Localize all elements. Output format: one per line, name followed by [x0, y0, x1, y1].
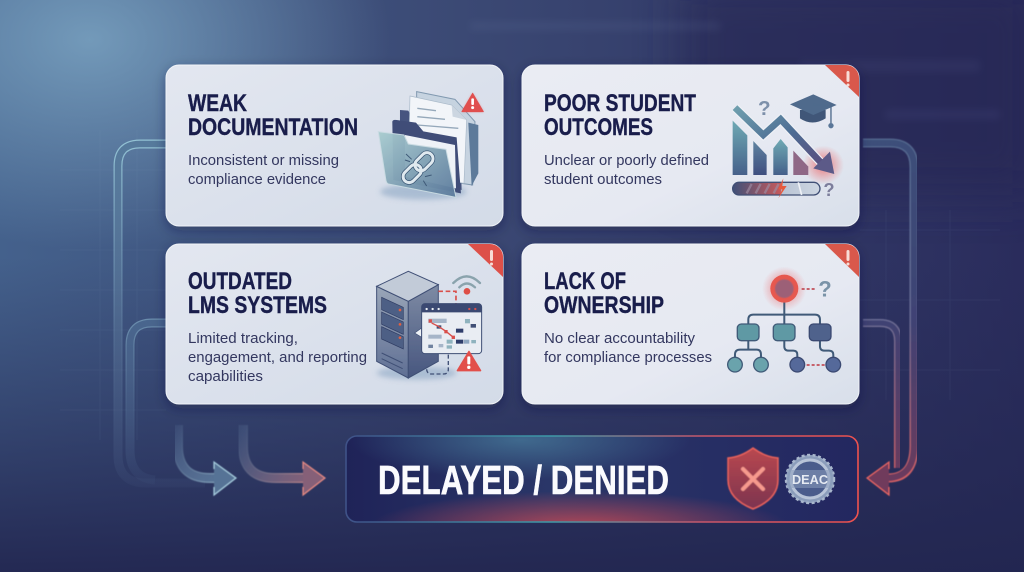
heading: DOCUMENTATION: [188, 114, 358, 141]
heading: OUTDATED: [188, 268, 292, 295]
description: capabilities: [188, 369, 263, 385]
heading: [544, 90, 696, 141]
icon: broken-link folder with warning: [378, 92, 483, 200]
description: for compliance processes: [544, 350, 712, 366]
heading: LACK OF: [544, 268, 626, 295]
panel: outdated lms systems: [166, 244, 504, 404]
heading: OWNERSHIP: [544, 292, 664, 319]
heading: [544, 268, 664, 319]
heading: WEAK: [188, 90, 248, 117]
heading: DELAYED / DENIED: [378, 457, 669, 503]
description: [188, 331, 367, 385]
description: [188, 153, 339, 188]
icon: org chart with missing owner: [728, 267, 841, 372]
icon: shield with x: [728, 448, 778, 509]
description: Limited tracking,: [188, 331, 298, 347]
heading: LMS SYSTEMS: [188, 292, 327, 319]
icon: org chart with missing owner: ?: [818, 277, 832, 302]
alert corner: [825, 244, 860, 278]
icon: deac seal: DEAC: [792, 472, 829, 487]
description: [544, 153, 709, 188]
arrow: right outer connector into banner: [863, 143, 914, 495]
panel: poor student outcomes: [522, 65, 860, 226]
panel: weak documentation: [166, 65, 503, 226]
description: [544, 331, 712, 366]
heading: [188, 90, 358, 141]
arrow: into banner from left 1: [178, 425, 236, 495]
heading: OUTCOMES: [544, 114, 653, 141]
panel: delayed / denied banner: [345, 435, 859, 523]
heading: POOR STUDENT: [544, 90, 696, 117]
arrow: into banner from left 2: [243, 425, 325, 495]
icon: deac seal: [786, 455, 834, 503]
description: compliance evidence: [188, 172, 326, 188]
description: Unclear or poorly defined: [544, 153, 709, 169]
description: student outcomes: [544, 172, 662, 188]
panel: lack of ownership: [522, 244, 860, 404]
alert corner: [825, 65, 860, 98]
icon: declining chart with graduation cap: [733, 94, 844, 200]
description: engagement, and reporting: [188, 350, 367, 366]
arrow: left inner connector: [130, 323, 166, 480]
icon: declining chart with graduation cap: ?: [758, 97, 771, 120]
arrow: right inner connector: [863, 323, 898, 468]
icon: declining chart with graduation cap: ?: [823, 179, 835, 200]
heading: [188, 268, 327, 319]
description: Inconsistent or missing: [188, 153, 339, 169]
arrow: left outer connector: [118, 144, 205, 483]
alert corner: [468, 244, 504, 278]
description: No clear accountability: [544, 331, 696, 347]
icon: server with broken dashboard: [377, 271, 482, 380]
